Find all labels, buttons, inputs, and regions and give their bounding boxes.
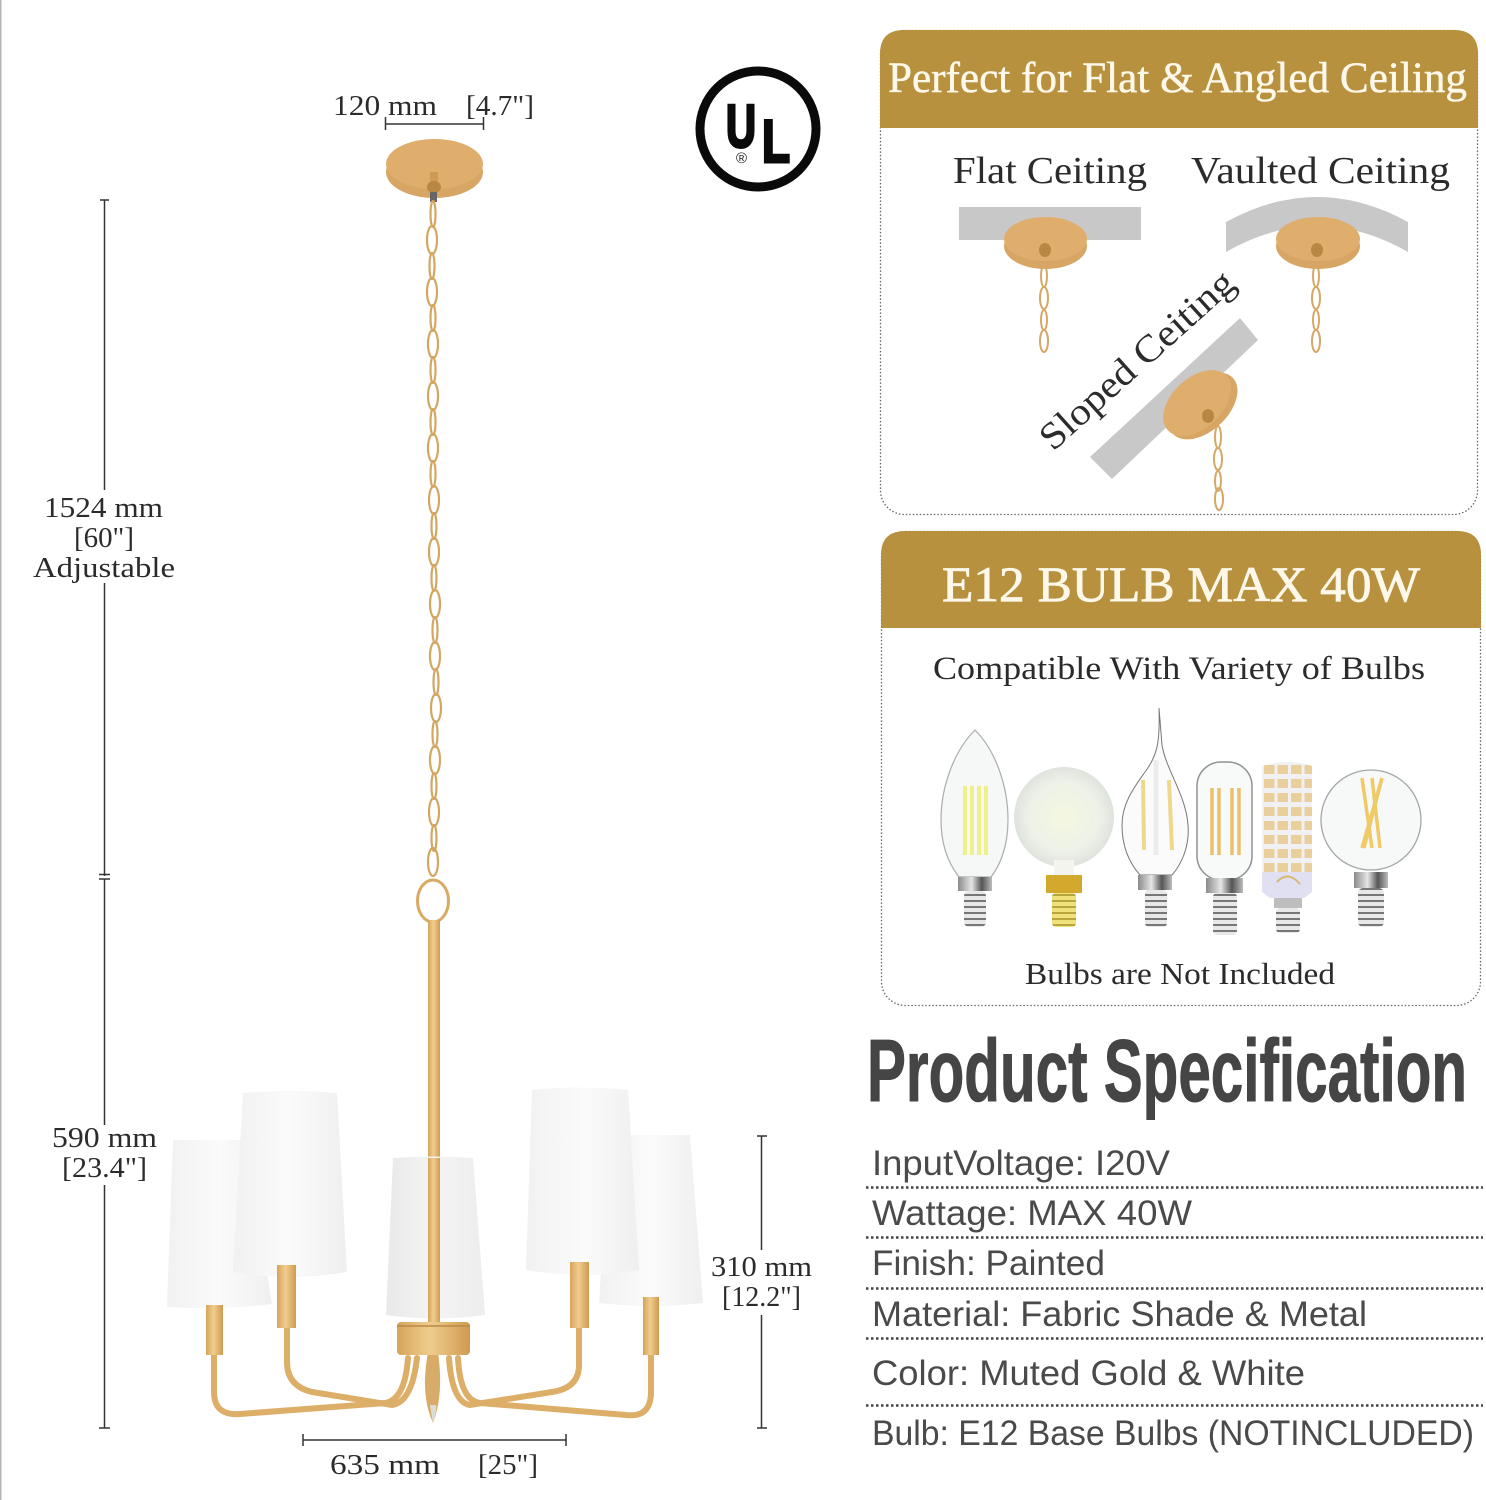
dimension: shade height (711, 1136, 812, 1428)
ceiling canopy (386, 139, 483, 202)
candle cups (206, 1262, 659, 1355)
dimension: chain height: 1524 mm (44, 492, 163, 524)
panel heading: Perfect for Flat & Angled Ceiling (888, 55, 1467, 102)
spec: bulb: Bulb: E12 Base Bulbs (NOTINCLUDED) (872, 1414, 1474, 1453)
lamp shade center (386, 1156, 485, 1318)
panel header (881, 531, 1481, 628)
compatibility subtitle: Compatible With Variety of Bulbs (933, 651, 1425, 687)
bulb: candle clear (941, 730, 1008, 927)
icon: UL certification mark: U (726, 93, 756, 160)
dimension: fixture height: [23.4"] (62, 1152, 147, 1184)
sloped ceiling illustration (1090, 318, 1258, 510)
spec: finish: Finish: Painted (872, 1244, 1105, 1283)
bulb: tubular (1197, 762, 1252, 935)
dimension: fixture height: 590 mm (52, 1122, 157, 1154)
lamp shade far right (599, 1135, 703, 1306)
hanging ring and center rod (418, 880, 448, 1325)
panel: bulb compatibility (881, 531, 1481, 1006)
icon: UL certification mark: L (762, 108, 790, 175)
dimension: canopy width (333, 90, 534, 130)
bulb: flame tip (1122, 708, 1188, 927)
flat ceiling illustration (959, 207, 1141, 352)
panel header (880, 30, 1478, 128)
lamp shade far left (167, 1140, 272, 1308)
panel: ceiling compatibility (880, 30, 1478, 514)
spec: wattage: Wattage: MAX 40W (872, 1194, 1192, 1233)
label: sloped ceiling: Sloped Ceiting (1031, 262, 1243, 459)
dimension: canopy width: [4.7"] (466, 90, 534, 122)
lamp shade inner right (526, 1088, 639, 1275)
bulb: clear globe (1321, 770, 1421, 927)
spec: input voltage: InputVoltage: I20V (872, 1144, 1171, 1183)
dimension: canopy width: 120 mm (333, 90, 437, 122)
dimension: fixture width (303, 1434, 566, 1481)
dimension: fixture width: 635 mm (330, 1449, 440, 1481)
dimension: chain height: Adjustable (33, 552, 175, 584)
dimension: chain height (33, 200, 175, 879)
dimension: fixture width: [25"] (478, 1449, 538, 1481)
center hub and finial (397, 1322, 470, 1423)
lamp shade inner left (233, 1091, 347, 1277)
panel heading: E12 BULB MAX 40W (942, 556, 1421, 612)
label: vaulted ceiling: Vaulted Ceiting (1191, 150, 1450, 192)
bulb row (941, 708, 1421, 935)
chain (427, 201, 441, 876)
vaulted ceiling illustration (1226, 197, 1408, 352)
chandelier illustration (167, 139, 703, 1423)
icon: UL certification mark: ® (736, 150, 747, 167)
dimension: shade height: 310 mm (711, 1251, 812, 1283)
dimension: shade height: [12.2"] (722, 1281, 801, 1313)
rod front segment (428, 1158, 440, 1328)
icon: UL certification mark (700, 71, 816, 187)
dimension: chain height: [60"] (74, 522, 134, 554)
specification list (866, 1144, 1483, 1453)
dimension: fixture height (52, 879, 157, 1428)
bulb: LED corn (1262, 762, 1312, 933)
bulb: frosted globe (1014, 767, 1114, 927)
arms (214, 1328, 651, 1415)
spec: material: Material: Fabric Shade & Metal (872, 1295, 1367, 1334)
label: flat ceiling: Flat Ceiting (953, 150, 1147, 192)
spec: color: Color: Muted Gold & White (872, 1354, 1305, 1393)
bulbs note: Bulbs are Not Included (1025, 956, 1336, 991)
